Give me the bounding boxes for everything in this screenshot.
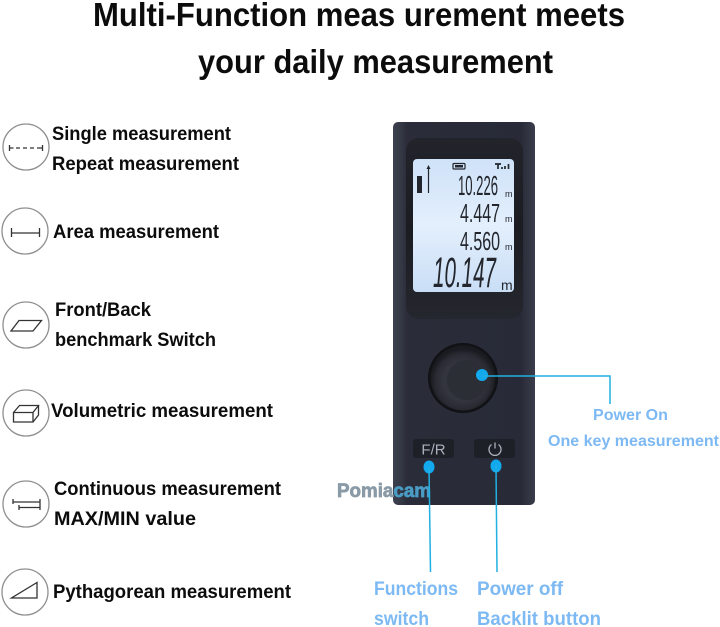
feature: area measurement bbox=[2, 208, 220, 254]
power button bbox=[474, 439, 515, 458]
feature: volumetric measurement bbox=[3, 390, 274, 436]
round measurement knob bbox=[428, 343, 498, 413]
callout: power on bbox=[548, 407, 720, 450]
feature: volumetric measurement: Volumetric measurement bbox=[51, 401, 274, 422]
lcd screen: 4.447 bbox=[460, 198, 500, 228]
title bbox=[93, 0, 625, 80]
lcd screen: 10.147 bbox=[433, 249, 497, 297]
callout: power on: Power On bbox=[593, 407, 668, 424]
callout: functions switch bbox=[374, 579, 458, 627]
lcd screen: 4.560 bbox=[460, 226, 500, 256]
title: your daily measurement bbox=[198, 43, 553, 80]
feature: front/back benchmark switch bbox=[3, 300, 216, 351]
lcd screen: m bbox=[505, 242, 512, 252]
feature: single and repeat measurement: Single measurement bbox=[52, 124, 232, 145]
feature: continuous measurement and max/min value: Continuous measurement bbox=[54, 479, 282, 500]
callout: power off and backlit: Power off bbox=[477, 579, 564, 600]
feature: continuous measurement and max/min value bbox=[3, 479, 282, 530]
watermark: Pomiacam bbox=[337, 481, 431, 502]
feature: continuous measurement and max/min value: MAX/MIN value bbox=[54, 509, 196, 530]
lcd screen: 10.226 bbox=[458, 170, 498, 201]
device: laser distance meter bbox=[393, 122, 535, 505]
callout: functions switch: Functions bbox=[374, 579, 458, 600]
callout: power off and backlit bbox=[477, 579, 601, 627]
lcd screen bbox=[413, 159, 514, 297]
feature: pythagorean measurement: Pythagorean measurement bbox=[53, 582, 292, 603]
feature: single and repeat measurement: Repeat measurement bbox=[52, 154, 240, 175]
feature: area measurement: Area measurement bbox=[53, 222, 220, 243]
arrow: knob callout line bbox=[476, 369, 610, 404]
F/R button bbox=[413, 439, 454, 458]
callout: power on: One key measurement bbox=[548, 433, 720, 450]
feature: single and repeat measurement bbox=[3, 124, 240, 175]
arrow: power callout line bbox=[490, 460, 502, 572]
feature: pythagorean measurement bbox=[2, 569, 292, 615]
screen bezel bbox=[406, 138, 523, 319]
arrow: F/R callout line bbox=[424, 460, 434, 572]
feature: front/back benchmark switch: benchmark Switch bbox=[55, 330, 216, 351]
lcd screen: m bbox=[505, 214, 512, 224]
lcd screen: m bbox=[501, 277, 513, 293]
F/R button: F/R bbox=[421, 442, 446, 458]
feature: front/back benchmark switch: Front/Back bbox=[55, 300, 151, 321]
lcd screen: m bbox=[505, 189, 512, 199]
device body bbox=[393, 122, 535, 505]
